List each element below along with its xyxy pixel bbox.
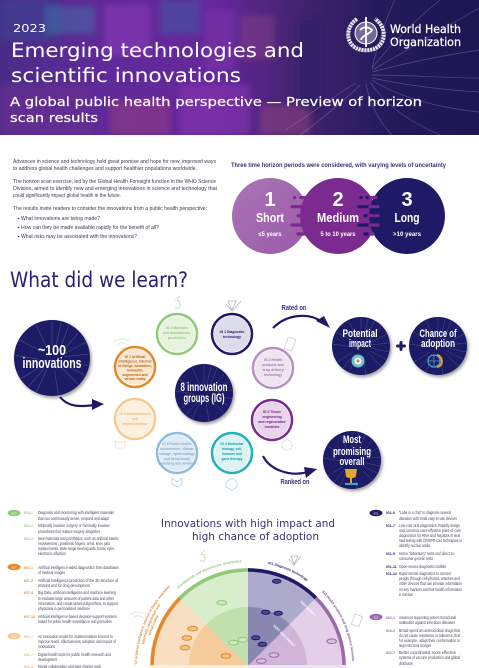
circle: IG8 public health: modelling and analysis bbox=[158, 462, 196, 466]
list: IG2: target structural changes bbox=[399, 643, 431, 648]
list: IG1: in real time bbox=[399, 592, 413, 597]
circle: IG6 demonstration and implementation: and bbox=[132, 417, 138, 421]
chart heading: high chance of adoption bbox=[192, 531, 319, 543]
list: IG7: based for public health surveillance and promotion bbox=[38, 619, 113, 624]
list: IG2: antibodies against infectious diseases bbox=[399, 620, 455, 625]
chart labels: HIGH IMPACT bbox=[299, 600, 317, 618]
circle: long: >10 years bbox=[393, 232, 422, 238]
circle: IG8 public health: change, epidemiology bbox=[159, 452, 195, 456]
list: IG1: IG1-6 bbox=[386, 511, 395, 515]
list: IG1: IG1-12 bbox=[386, 572, 397, 576]
list: IG2: Advances supporting potent monoclonal bbox=[399, 615, 456, 620]
list: IG6: IG6-7 bbox=[24, 653, 33, 657]
icon: pills bbox=[284, 337, 296, 351]
time horizons heading: Three time horizon periods were considered, with varying levels of uncertainty bbox=[231, 162, 446, 169]
header subtitle bbox=[10, 94, 422, 125]
circle: IG2 health products: technology bbox=[264, 373, 282, 377]
sector: purple bbox=[248, 597, 346, 666]
list: IG1: Open-source diagnostic toolkits bbox=[399, 564, 446, 569]
chart heading: Innovations with high impact and bbox=[161, 518, 335, 530]
icon: check mark bbox=[226, 301, 241, 311]
chart icons bbox=[130, 550, 362, 627]
list: IG7: IG7-12 bbox=[24, 615, 35, 619]
list: IG3: procedures that replace surgery altogether bbox=[38, 529, 100, 534]
list: IG1: diagnostics for RNA and hepatitis B viral bbox=[399, 533, 460, 538]
circle: IG5 tissue engineering: medicine bbox=[265, 425, 279, 429]
list: IG7 bbox=[24, 565, 119, 624]
pill: IG7: IG7 bbox=[12, 565, 17, 569]
header title: scientific innovations bbox=[11, 64, 241, 87]
list: IG1: Rapid remote diagnostics to connect bbox=[399, 571, 452, 576]
circle: IG1 diagnostic bbox=[212, 314, 252, 354]
circle: IG3 materials: IG 3 Materials bbox=[166, 326, 188, 330]
circle: IG4 molecular biology bbox=[212, 433, 252, 473]
circle: IG7 artificial intelligence: intelligence, internet bbox=[119, 360, 152, 364]
circle: IG7 artificial intelligence bbox=[115, 347, 155, 387]
circle: IG4 molecular biology: IG 4 Molecular bbox=[220, 442, 244, 446]
circle: ~100 innovations: ~100 bbox=[38, 342, 66, 359]
intro text block: The horizon scan exercise, led by the Global Health Foresight function in the WHO Science bbox=[13, 179, 216, 185]
pill: IG6 bbox=[8, 633, 20, 639]
circle: IG7 artificial intelligence: augmented and bbox=[122, 373, 148, 377]
list: IG3: electronic olfaction bbox=[38, 551, 67, 556]
circle: IG1 diagnostic: technology bbox=[223, 335, 241, 339]
header subtitle: A global public health perspective — Preview of horizon bbox=[10, 94, 422, 109]
circle: IG4 molecular biology: immune and bbox=[222, 452, 242, 456]
list: IG6: Digital health tools for public health research and bbox=[38, 652, 112, 657]
list: IG6: An innovation model for implementation science to bbox=[38, 634, 114, 639]
circle: short: ≤5 years bbox=[258, 232, 282, 238]
circle: ~100 innovations: innovations bbox=[22, 356, 82, 372]
intro text block bbox=[13, 159, 218, 240]
circle: potential impact: impact bbox=[349, 338, 371, 350]
circle: medium bbox=[300, 178, 376, 254]
circle: most promising overall: promising bbox=[333, 446, 371, 458]
list: IG7: proteins and for drug development bbox=[38, 583, 91, 588]
list: IG7: IG7-2 bbox=[24, 579, 33, 583]
list: IG7: IG7-4 bbox=[24, 591, 33, 595]
circle: IG7 artificial intelligence: IG 7 Artificial bbox=[125, 355, 145, 359]
circle: 8 innovation groups: groups (IG) bbox=[184, 393, 225, 405]
circle: IG6 demonstration and implementation: IG 6 Demonstration bbox=[119, 412, 151, 416]
circle: IG2 health products: products and bbox=[262, 363, 284, 367]
list: IG3 bbox=[24, 510, 119, 556]
list: IG7: IG7-1 bbox=[24, 566, 33, 570]
intro text block: Division, aimed to identify new and emerging innovations in science and technology that bbox=[13, 186, 218, 192]
pill: IG1 bbox=[370, 510, 382, 516]
sector: navy bbox=[248, 568, 317, 666]
chart data markers bbox=[180, 579, 337, 663]
intro text block: Advances in science and technology hold great promise and hope for new, improved ways bbox=[13, 159, 216, 165]
icon: people bbox=[115, 441, 125, 448]
circle: IG2 health products bbox=[253, 348, 293, 388]
list: IG1: people through cell phones, watches and bbox=[399, 576, 461, 581]
icon: cog bbox=[282, 440, 292, 450]
time horizon circles bbox=[232, 178, 445, 254]
list: IG2: IG2-2 bbox=[386, 629, 395, 633]
chart labels: VERY HIGH IMPACT bbox=[272, 624, 296, 648]
intro text block: The results invite readers to consider the innovations from a public health perspective: bbox=[13, 206, 207, 212]
list: IG6: development bbox=[38, 657, 58, 662]
circle: short: 1 bbox=[264, 189, 276, 211]
icon: target bbox=[352, 354, 364, 368]
list: IG6: improve reach, effectiveness, adoption and impact of bbox=[38, 639, 117, 644]
sector: orange bbox=[150, 597, 248, 666]
chart heading bbox=[161, 518, 335, 543]
chart labels: IG3 Materials and biomaterials, prosthetics bbox=[177, 560, 242, 588]
list: IG6 bbox=[24, 634, 117, 668]
list: IG7: to evaluate large amounts of patient data and other bbox=[38, 596, 114, 601]
pill: IG2 bbox=[370, 614, 382, 620]
icon: WHO emblem bbox=[348, 17, 384, 50]
list: IG1: "Labs in a chip" to diagnose several bbox=[399, 510, 451, 515]
WHO wordmark: World Health bbox=[390, 22, 461, 36]
list: IG2 bbox=[386, 615, 461, 666]
circle: potential impact bbox=[332, 317, 390, 375]
chart labels: virtual reality bbox=[148, 615, 159, 636]
circle: ~100 innovations bbox=[14, 320, 90, 396]
chart labels: IG1 Diagnostic technology bbox=[268, 562, 308, 581]
list: IG3: that can continuously sense, respond and adapt bbox=[38, 516, 110, 521]
circle: medium: 2 bbox=[332, 189, 344, 211]
WHO wordmark bbox=[390, 22, 461, 49]
chart labels: IG7 Artificial intelligence, internet of things, wearables, bbox=[134, 586, 170, 664]
plus sign bbox=[398, 342, 404, 350]
list: IG2: IG2-7 bbox=[386, 651, 395, 655]
list: IG1: IG1-7 bbox=[386, 524, 395, 528]
list: IG7: Artificial intelligence-aided diagnostics from databases bbox=[38, 565, 119, 570]
list: IG2: for example, adapt their conformation to bbox=[399, 638, 461, 643]
intro text block: What risks may be associated with the innovations? bbox=[21, 234, 137, 240]
icon: trophy bbox=[345, 469, 358, 484]
circle: chance of adoption: Chance of bbox=[420, 328, 457, 340]
intro text block: to address global health challenges and support healthier populations worldwide. bbox=[13, 166, 197, 172]
circle: IG2 health products: IG 2 Health bbox=[264, 358, 282, 362]
list: IG7: Artificial intelligence prediction of the 3D structure of bbox=[38, 578, 119, 583]
circle: chance of adoption: adoption bbox=[421, 338, 455, 350]
semicircle chart bbox=[130, 550, 363, 668]
list: IG1: load testing with CRISPR-Cas techniques to bbox=[399, 538, 463, 543]
chart labels bbox=[134, 560, 354, 664]
list: IG1: other devices that can provide information bbox=[399, 581, 463, 586]
list: IG6: IG6-1 bbox=[24, 635, 33, 639]
arrow: ranked on bbox=[263, 456, 317, 486]
list: IG2: do not cause resistance or tolerance, that bbox=[399, 633, 461, 638]
list: IG1: consumer genetic tests bbox=[399, 556, 433, 561]
intro text block: What innovations are being made? bbox=[21, 216, 100, 222]
circle: chance of adoption bbox=[409, 317, 467, 375]
list: IG1: diseases with small easy-to-use devices bbox=[399, 516, 457, 521]
circle: IG5 tissue engineering: and regenerative bbox=[258, 420, 286, 424]
circle: IG4 molecular biology: gene therapy bbox=[221, 457, 243, 461]
circle: IG5 tissue engineering: IG 5 Tissue bbox=[263, 410, 281, 414]
list: IG3: replacements, wide-range hearing aids, bionic eyes, bbox=[38, 546, 115, 551]
circle: 8 innovation groups bbox=[175, 364, 233, 422]
circle: IG4 molecular biology: biology, cell, bbox=[222, 447, 242, 451]
header banner bbox=[0, 0, 479, 135]
arrow: rated on: Rated on bbox=[282, 305, 306, 312]
header title bbox=[11, 39, 304, 87]
list: IG1 bbox=[386, 510, 463, 597]
list: IG3: IG3-3 bbox=[24, 537, 33, 541]
circle: most promising overall: overall bbox=[340, 456, 364, 468]
icon: wifi bbox=[114, 339, 130, 349]
intro text block: How can they be made available rapidly for the benefit of all? bbox=[21, 225, 159, 231]
list: IG7: information, and create tailored algorithms, to support bbox=[38, 601, 119, 606]
circle: IG5 tissue engineering: engineering bbox=[262, 415, 282, 419]
circle: long: 3 bbox=[401, 189, 413, 211]
circle: IG7 artificial intelligence: virtual reality bbox=[124, 377, 146, 381]
circle: IG7 artificial intelligence: telehealth, bbox=[127, 368, 143, 372]
list: IG1: and construct user-effective point-of-care bbox=[399, 528, 462, 533]
header title: Emerging technologies and bbox=[11, 39, 304, 62]
circle: IG2 health products: drug delivery bbox=[262, 368, 284, 372]
circle: IG3 materials: prosthetics bbox=[168, 336, 186, 340]
header subtitle: scan results bbox=[10, 110, 98, 125]
list: IG3: New materials and prosthetics, such as artificial hearts, bbox=[38, 536, 119, 541]
circle: short: Short bbox=[256, 210, 285, 225]
circle: IG8 public health: and behavioural bbox=[164, 457, 190, 461]
circle: IG6 demonstration and implementation: implementation bbox=[122, 422, 148, 426]
heading: what did we learn: What did we learn? bbox=[10, 268, 188, 292]
WHO wordmark: Organization bbox=[390, 35, 461, 49]
icons around innovation groups bbox=[114, 296, 296, 490]
list: IG7: Big Data, artificial intelligence and machine learning bbox=[38, 590, 117, 595]
list: IG2: IG2-1 bbox=[386, 616, 395, 620]
list: IG3: exoskeletons , prosthetic fingers, arms, knee joint bbox=[38, 541, 111, 546]
icon: globe and gear bbox=[428, 355, 442, 367]
arrow: ranked on: Ranked on bbox=[280, 479, 310, 486]
circle: IG7 artificial intelligence: of things, wearables, bbox=[118, 364, 152, 368]
arrow: innovations to groups bbox=[60, 397, 104, 410]
header text: year: 2023 bbox=[13, 22, 46, 35]
circle: 8 innovation groups: 8 innovation bbox=[180, 382, 228, 394]
list: IG1: Low-cost viral diagnostics. Rapidly design bbox=[399, 523, 461, 528]
list: IG1: IG1-9 bbox=[386, 552, 395, 556]
pill: IG3 bbox=[8, 510, 20, 516]
pill: IG6: IG6 bbox=[12, 634, 17, 638]
chart labels: IG2 Health products and drug delivery technology bbox=[322, 590, 354, 661]
list: IG2: distribution bbox=[399, 661, 413, 666]
icon: globe bbox=[172, 478, 182, 487]
circle: medium: 5 to 10 years bbox=[320, 232, 356, 238]
right innovation list bbox=[370, 510, 463, 666]
pill: IG2: IG2 bbox=[374, 615, 379, 619]
WHO logo bbox=[348, 17, 461, 50]
list: IG7: physicians in personalized medicine bbox=[38, 606, 91, 611]
list: IG6: innovations bbox=[38, 644, 55, 649]
circle: IG8 public health: environment, climate bbox=[160, 447, 194, 451]
icon: wifi bbox=[130, 612, 146, 618]
icon: check mark bbox=[289, 556, 301, 565]
intro text block: could significantly impact global health in the future. bbox=[13, 193, 121, 199]
list: IG1: IG1-11 bbox=[386, 565, 397, 569]
list: IG2: systems of vaccine production and global bbox=[399, 655, 460, 660]
connector dashes bbox=[292, 198, 378, 234]
circle: long: Long bbox=[394, 210, 420, 225]
list: IG7: of medical images bbox=[38, 570, 65, 575]
circle: IG3 materials bbox=[157, 314, 197, 354]
icon: leaf bbox=[200, 550, 205, 561]
list: IG2: Better coordinated, more effective bbox=[399, 650, 457, 655]
pill: IG7 bbox=[8, 564, 20, 570]
circle: long bbox=[369, 178, 445, 254]
list: IG3: Diagnosis and monitoring with intelligent materials bbox=[38, 510, 114, 515]
circle: potential impact: Potential bbox=[342, 328, 378, 340]
list: IG1: Home "laboratory" tests and direct-to- bbox=[399, 551, 455, 556]
pill: IG1: IG1 bbox=[374, 511, 379, 515]
circle: IG6 demonstration and implementation bbox=[115, 399, 155, 439]
circle: IG5 tissue engineering bbox=[252, 400, 292, 440]
list: IG2: Broad-spectrum antimicrobial drugs that bbox=[399, 628, 461, 633]
list: IG1: on key markers and link health information bbox=[399, 587, 463, 592]
circle: IG8 public health: IG 8 Public health: bbox=[162, 442, 192, 446]
list: IG3: IG3-1 bbox=[24, 511, 33, 515]
circle: most promising overall bbox=[323, 431, 381, 489]
chart base strip bbox=[150, 665, 346, 668]
circle: IG1 diagnostic: IG 1 Diagnostic bbox=[220, 330, 244, 334]
chart labels: telehealth, augmented and bbox=[142, 604, 160, 644]
left innovation list bbox=[8, 510, 119, 668]
pill: IG3: IG3 bbox=[12, 511, 17, 515]
circle: most promising overall: Most bbox=[343, 434, 361, 446]
circle: IG8 public health bbox=[157, 433, 197, 473]
icon: molecule bbox=[226, 478, 237, 490]
sector: green bbox=[179, 568, 248, 666]
circle: medium: Medium bbox=[317, 210, 359, 225]
icon: pills bbox=[351, 614, 362, 627]
circle: IG3 materials: and biomaterials, bbox=[163, 331, 191, 335]
arrow: rated on bbox=[273, 305, 330, 328]
list: IG3: Minimally invasive surgery or minimally invasive bbox=[38, 523, 111, 528]
list: IG1: identify nucleic acids bbox=[399, 543, 430, 548]
icon: leaf bbox=[175, 296, 180, 308]
list: IG3: IG3-2 bbox=[24, 524, 33, 528]
circle: short bbox=[232, 178, 308, 254]
list: IG7: Artificial intelligence-based decision-support systems bbox=[38, 614, 117, 619]
